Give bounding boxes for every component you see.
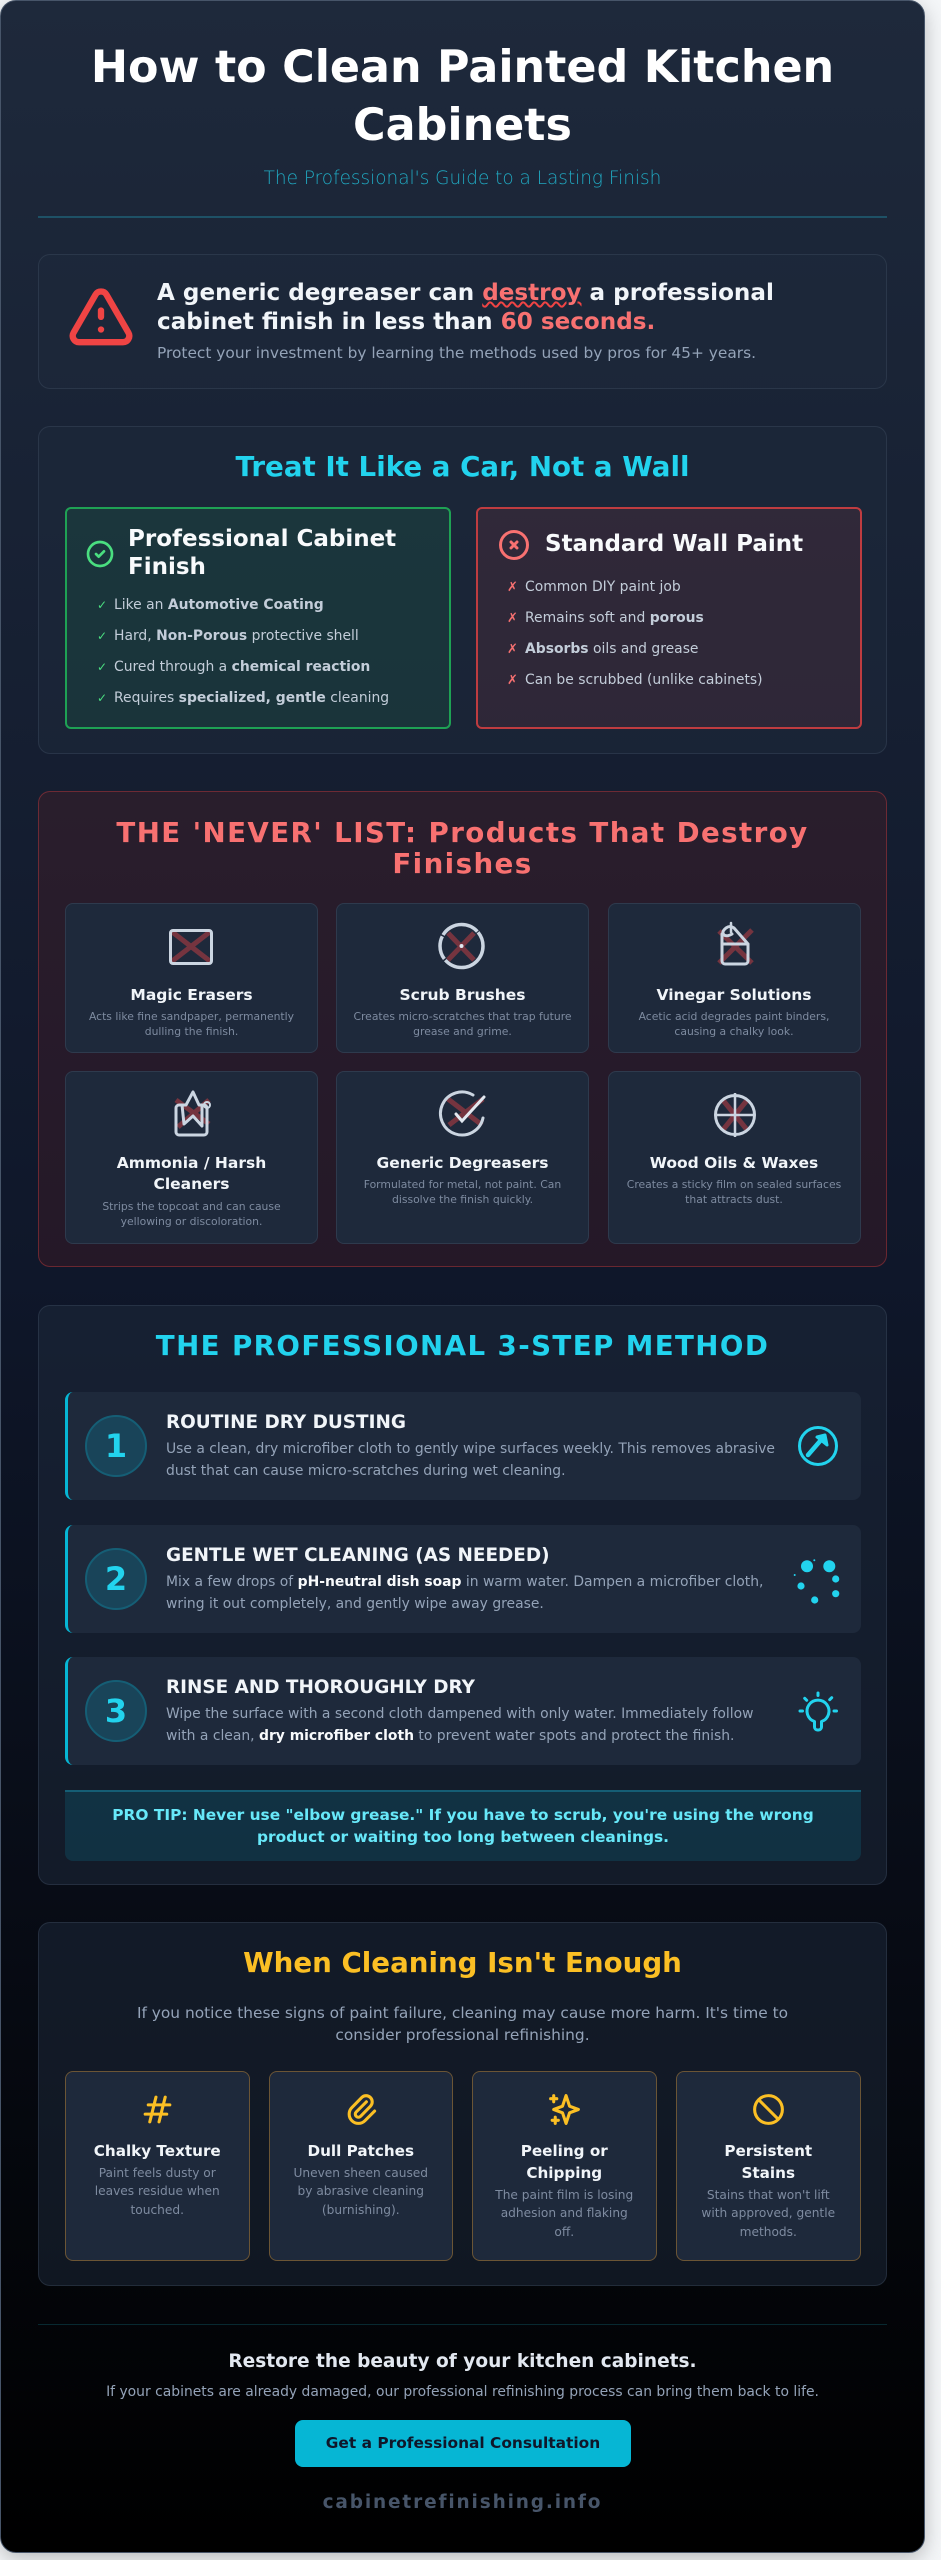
card title: Finish [128, 554, 206, 580]
button: consultation [295, 2420, 631, 2467]
panel: when cleaning isn't enough [38, 1922, 887, 2286]
feature list: Cured through a chemical reaction [114, 659, 370, 675]
description: Formulated for metal, not paint. Can [364, 1178, 561, 1191]
label [116, 1154, 266, 1193]
alert headline: cabinet finish in less than 60 seconds. [157, 309, 655, 335]
feature list: ✗ [507, 611, 518, 626]
step description: wring it out completely, and gently wipe away grease. [166, 1596, 544, 1612]
panel: standard wall paint [476, 507, 862, 729]
step number [85, 1548, 147, 1610]
step 3 [65, 1657, 861, 1765]
label: Dull Patches [307, 2142, 414, 2160]
label: Chalky Texture [94, 2142, 221, 2160]
icon: degreaser [438, 1090, 486, 1136]
label: Magic Erasers [130, 986, 253, 1004]
title [91, 42, 834, 151]
description [89, 1010, 294, 1038]
description: Creates a sticky film on sealed surfaces [627, 1178, 841, 1191]
feature list: ✗ [507, 580, 518, 595]
intro text: consider professional refinishing. [335, 2026, 590, 2044]
description: Acts like fine sandpaper, permanently [89, 1010, 294, 1023]
icon: ammonia bottle [174, 1090, 211, 1136]
pro tip callout: PRO TIP: Never use "elbow grease." If you have to scrub, you're using the wrong [112, 1806, 814, 1824]
step title: ROUTINE DRY DUSTING [166, 1412, 406, 1433]
step title: GENTLE WET CLEANING (AS NEEDED) [166, 1545, 550, 1566]
description: that attracts dust. [685, 1193, 783, 1206]
description [627, 1178, 841, 1206]
feature list: Requires specialized, gentle cleaning [114, 690, 389, 706]
description [353, 1010, 572, 1038]
feature list: Absorbs oils and grease [525, 641, 698, 657]
label: Persistent [724, 2142, 812, 2160]
description: by abrasive cleaning [298, 2184, 424, 2198]
description: off. [554, 2225, 574, 2239]
icon: check circle [86, 540, 114, 568]
description: dulling the finish. [145, 1025, 238, 1038]
card: peeling or chipping [472, 2071, 656, 2261]
description: methods. [740, 2225, 797, 2239]
heading: treat it like a car: Treat It Like a Car, Not a Wall [236, 450, 689, 483]
title: Cabinets [353, 100, 572, 151]
label: Peeling or [521, 2142, 608, 2160]
description [638, 1010, 829, 1038]
description [95, 2166, 220, 2217]
feature list: Like an Automotive Coating [114, 597, 324, 613]
label: Ammonia / Harsh [117, 1154, 266, 1172]
feature list: ✓ [97, 660, 107, 674]
icon: dusting wand [798, 1426, 838, 1466]
card title [128, 526, 396, 580]
panel: 3-step method [38, 1305, 887, 1885]
card: magic erasers [65, 903, 318, 1053]
description: Creates micro-scratches that trap future [353, 1010, 572, 1023]
description: leaves residue when [95, 2184, 220, 2198]
intro text [137, 2004, 788, 2044]
card title: Professional Cabinet [128, 526, 396, 552]
icon: ban [753, 2094, 784, 2125]
description [293, 2166, 428, 2217]
feature list [97, 597, 389, 706]
label: Wood Oils & Waxes [650, 1154, 818, 1172]
description: with approved, gentle [701, 2206, 835, 2220]
pro tip callout: product or waiting too long between cleanings. [257, 1828, 669, 1846]
panel: professional cabinet finish [65, 507, 451, 729]
description [102, 1200, 281, 1228]
card: dull patches [268, 2071, 453, 2261]
description: The paint film is losing [495, 2188, 633, 2202]
footer domain: cabinetrefinishing.info [323, 2492, 602, 2513]
label: Vinegar Solutions [656, 986, 811, 1004]
alert subtext: Protect your investment by learning the methods used by pros for 45+ years. [157, 344, 756, 362]
feature list [507, 579, 763, 688]
description: (burnishing). [322, 2203, 400, 2217]
card: generic degreasers [336, 1071, 589, 1244]
heading: never list [116, 816, 809, 880]
alert headline [157, 280, 774, 335]
step title: RINSE AND THOROUGHLY DRY [166, 1677, 475, 1698]
card: wood oils and waxes [608, 1071, 860, 1244]
icon: eraser [169, 929, 213, 965]
pro tip callout [65, 1790, 861, 1861]
step number: 1 [105, 1427, 127, 1465]
feature list: Hard, Non-Porous protective shell [114, 628, 359, 644]
description: Uneven sheen caused [293, 2166, 428, 2180]
label: Scrub Brushes [399, 986, 526, 1004]
label: Cleaners [153, 1175, 230, 1193]
label [724, 2142, 812, 2182]
icon: light bulb [798, 1692, 838, 1732]
feature list: ✗ [507, 672, 518, 688]
title: How to Clean Painted Kitchen [91, 42, 834, 93]
description: dissolve the finish quickly. [392, 1193, 533, 1206]
step description [166, 1706, 753, 1744]
intro text: If you notice these signs of paint failure, cleaning may cause more harm. It's time to [137, 2004, 788, 2022]
label: Generic Degreasers [376, 1154, 549, 1172]
step number: 3 [105, 1692, 127, 1730]
heading: never list: THE 'NEVER' LIST: Products That Destroy [116, 816, 809, 848]
step description: with a clean, dry microfiber cloth to prevent water spots and protect the finish. [166, 1728, 734, 1744]
feature list: ✓ [97, 598, 107, 612]
card: scrub brushes [336, 903, 589, 1053]
feature list: ✗ [507, 642, 518, 657]
footer subtext: If your cabinets are already damaged, our professional refinishing process can bring them back to life. [106, 2384, 819, 2400]
card: chalky texture [65, 2071, 250, 2261]
description: Stains that won't lift [707, 2188, 830, 2202]
feature list: Can be scrubbed (unlike cabinets) [525, 672, 763, 688]
label [521, 2142, 608, 2182]
feature list: Common DIY paint job [525, 579, 681, 595]
step 2 [65, 1525, 861, 1633]
icon: wood oil [714, 1093, 756, 1137]
description: touched. [130, 2203, 184, 2217]
step description [166, 1441, 775, 1479]
description: Acetic acid degrades paint binders, [639, 1010, 829, 1023]
feature list: Remains soft and porous [525, 610, 704, 626]
icon: scrub brush [438, 922, 485, 970]
button: consultation: Get a Professional Consultation [326, 2434, 600, 2452]
footer headline: Restore the beauty of your kitchen cabinets. [228, 2351, 697, 2372]
step description: Wipe the surface with a second cloth dampened with only water. Immediately follow [166, 1706, 753, 1722]
icon: sparkles [549, 2094, 580, 2125]
card title: Standard Wall Paint [545, 531, 803, 557]
label: Stains [741, 2164, 795, 2182]
heading: 3-step method: THE PROFESSIONAL 3-STEP METHOD [156, 1328, 769, 1362]
step description: dust that can cause micro-scratches during wet cleaning. [166, 1463, 566, 1479]
step number: 2 [105, 1560, 127, 1598]
card: vinegar solutions [608, 903, 860, 1053]
step description: Use a clean, dry microfiber cloth to gently wipe surfaces weekly. This removes abrasive [166, 1441, 775, 1457]
feature list: ✓ [97, 629, 107, 643]
panel: never list [38, 791, 887, 1267]
subtitle: The Professional's Guide to a Lasting Finish [264, 168, 661, 189]
panel: car vs wall comparison [38, 426, 887, 754]
description: Strips the topcoat and can cause [102, 1200, 281, 1213]
description: grease and grime. [413, 1025, 512, 1038]
description: causing a chalky look. [674, 1025, 794, 1038]
step number [85, 1415, 147, 1477]
step 1 [65, 1392, 861, 1500]
step description [166, 1574, 763, 1612]
description [701, 2188, 835, 2239]
icon: vinegar bottle [717, 922, 754, 966]
icon: paperclip [348, 2094, 376, 2125]
icon: warning triangle [70, 288, 132, 346]
label: Chipping [526, 2164, 602, 2182]
icon: soap bubbles [794, 1559, 840, 1604]
panel: alert [38, 254, 887, 389]
icon: hash [144, 2096, 172, 2124]
icon: x circle [499, 530, 529, 560]
description: yellowing or discoloration. [121, 1215, 262, 1228]
description [495, 2188, 633, 2239]
card: persistent stains [676, 2071, 861, 2261]
description: Paint feels dusty or [99, 2166, 216, 2180]
step number [85, 1680, 147, 1742]
description: adhesion and flaking [501, 2206, 628, 2220]
step description: Mix a few drops of pH-neutral dish soap in warm water. Dampen a microfiber cloth, [166, 1574, 763, 1590]
description [364, 1178, 561, 1206]
feature list: ✓ [97, 690, 107, 704]
heading: When Cleaning Isn't Enough [243, 1946, 682, 1978]
card: ammonia and harsh cleaners [65, 1071, 318, 1244]
alert headline: A generic degreaser can destroy a professional [157, 280, 774, 306]
heading: never list: Finishes [392, 846, 533, 880]
